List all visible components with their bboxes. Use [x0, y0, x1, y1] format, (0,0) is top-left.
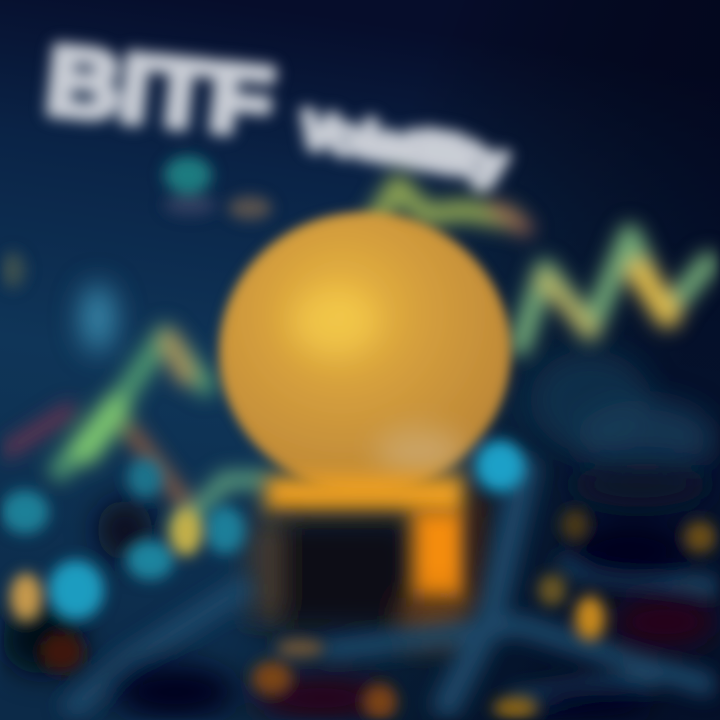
faint small labels under title: [164, 156, 272, 220]
coin highlight: [293, 290, 377, 354]
price line: upper right: [375, 185, 708, 345]
background haze: [81, 284, 715, 480]
title: [42, 26, 511, 192]
chart markers: yellow and orange dots: [1, 252, 716, 720]
title: BITF: [42, 26, 278, 157]
coin: [219, 212, 511, 492]
coin stand: [250, 476, 488, 643]
price line: left: [8, 335, 260, 530]
title: Volatility: [296, 101, 511, 192]
dark pockets: lower area: [2, 463, 717, 718]
chart markers: blue dots: [1, 440, 525, 620]
network lines: lower area: [75, 470, 708, 706]
